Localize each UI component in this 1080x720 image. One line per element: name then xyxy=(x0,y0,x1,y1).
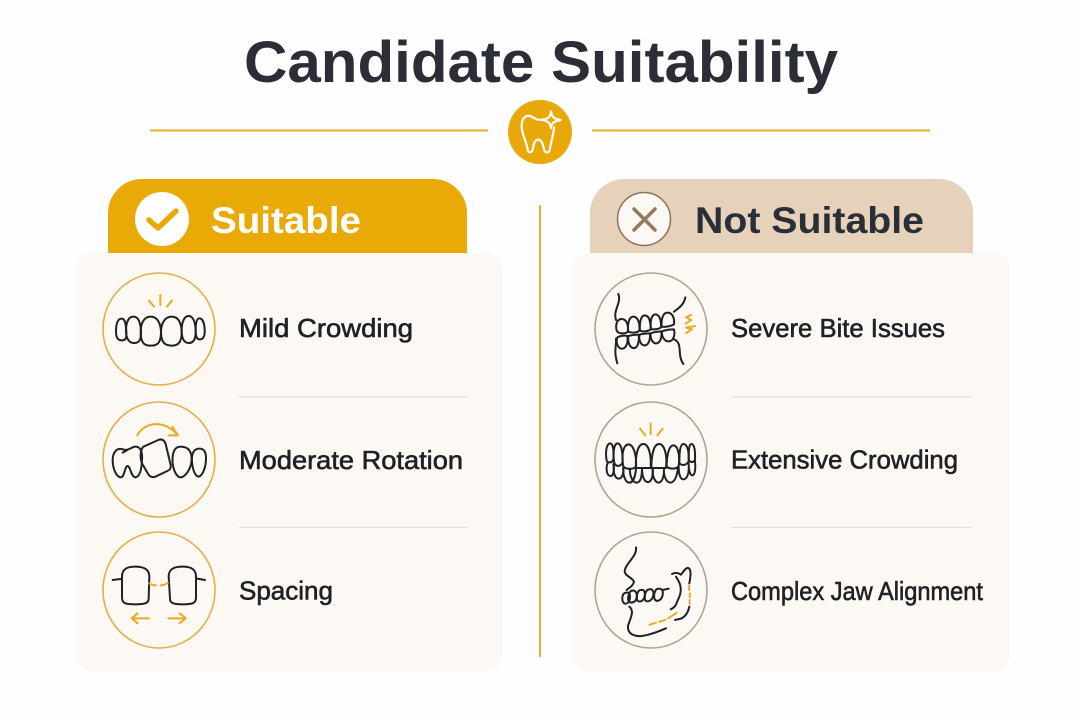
label: Severe Bite Issues: Severe Bite Issues xyxy=(731,313,945,343)
item: Extensive Crowding xyxy=(595,402,958,517)
item: Mild Crowding xyxy=(103,273,413,385)
panel: not suitable xyxy=(572,253,1010,671)
label: Complex Jaw Alignment: Complex Jaw Alignment xyxy=(731,576,984,606)
heading: Not Suitable: Not Suitable xyxy=(695,200,924,241)
panel: suitable xyxy=(75,253,502,671)
title: Candidate Suitability xyxy=(244,30,838,95)
icon: check mark xyxy=(135,192,189,246)
icon: tooth with sparkle badge xyxy=(508,100,572,164)
heading: Suitable: Suitable xyxy=(211,200,361,241)
icon: spacing xyxy=(103,532,215,648)
header: Suitable xyxy=(108,179,467,254)
icon: extensive crowding xyxy=(595,402,707,517)
item: Spacing xyxy=(103,532,333,648)
icon: mild crowding xyxy=(103,273,215,385)
item: Severe Bite Issues xyxy=(595,273,945,385)
header: Not Suitable xyxy=(590,179,973,254)
item: Moderate Rotation xyxy=(103,402,463,517)
icon: severe bite xyxy=(595,273,707,385)
icon: complex jaw alignment xyxy=(595,532,707,648)
icon: moderate rotation xyxy=(103,402,215,517)
icon: cross mark xyxy=(618,192,670,246)
label: Mild Crowding: Mild Crowding xyxy=(239,313,413,343)
vertical divider xyxy=(539,205,541,657)
label: Spacing: Spacing xyxy=(239,576,333,606)
item: Complex Jaw Alignment xyxy=(595,532,984,648)
label: Extensive Crowding: Extensive Crowding xyxy=(731,444,958,474)
label: Moderate Rotation: Moderate Rotation xyxy=(239,445,463,475)
